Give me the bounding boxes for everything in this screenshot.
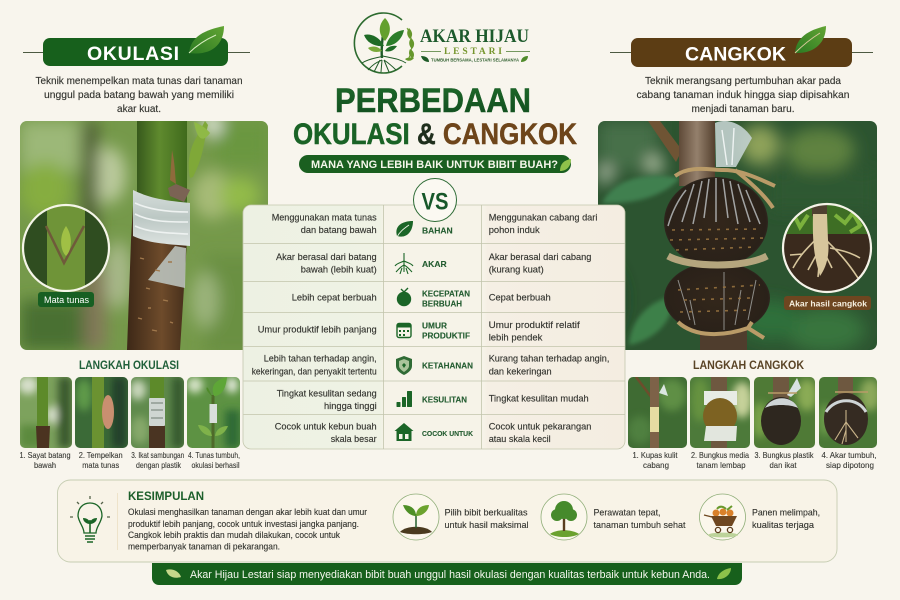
text: perawatan: Perawatan tepat, bbox=[594, 508, 660, 518]
captions: cabang bbox=[643, 460, 669, 470]
main title bbox=[293, 82, 578, 151]
label: akar hasil cangkok: Akar hasil cangkok bbox=[789, 298, 867, 308]
captions: 3. Ikat sambungan bbox=[131, 450, 184, 460]
text: panen: Panen melimpah, bbox=[752, 508, 820, 518]
captions bbox=[632, 450, 876, 470]
row: akar: AKAR bbox=[422, 259, 447, 269]
row: bahan: pohon induk bbox=[489, 225, 540, 236]
step 1 image bbox=[18, 376, 72, 448]
row: cocok untuk bbox=[275, 422, 591, 445]
row: bahan: Menggunakan cabang dari bbox=[489, 212, 597, 224]
captions: 2. Tempelkan bbox=[79, 450, 123, 460]
panel: okulasi header bbox=[23, 26, 250, 66]
row: ketahanan: kekeringan, dan penyakit tertentu bbox=[252, 366, 377, 378]
icon: seedling bbox=[393, 494, 439, 540]
text: kesimpulan: Cangkok lebih praktis dan mudah dilakukan, cocok untuk bbox=[128, 530, 341, 540]
row: bahan: BAHAN bbox=[422, 226, 453, 236]
row: umur produktif: Umur produktif lebih panjang bbox=[258, 324, 377, 336]
label: akar hasil cangkok bbox=[784, 296, 871, 310]
text: kesimpulan: produktif lebih panjang, cocok untuk investasi jangka panjang. bbox=[128, 519, 359, 529]
plastic bbox=[715, 121, 752, 167]
steps: cangkok bbox=[628, 377, 880, 470]
logo name: AKAR HIJAU bbox=[420, 27, 529, 47]
icon: roots bbox=[395, 253, 413, 274]
row: kecepatan berbuah: KECEPATAN bbox=[422, 288, 470, 298]
row: umur produktif bbox=[258, 320, 580, 344]
photo: okulasi graft bbox=[19, 112, 270, 355]
row: akar: Akar berasal dari cabang bbox=[489, 252, 591, 263]
row: kecepatan berbuah bbox=[292, 288, 551, 308]
text: pilih bibit: untuk hasil maksimal bbox=[444, 520, 529, 530]
branch bbox=[648, 121, 682, 162]
row: bahan bbox=[272, 212, 597, 237]
text: pilih bibit: Pilih bibit berkualitas bbox=[444, 508, 528, 518]
row: umur produktif: PRODUKTIF bbox=[422, 330, 470, 340]
step 2 image bbox=[75, 377, 128, 448]
icon: light bulb bbox=[70, 496, 110, 542]
row: cocok untuk: Cocok untuk kebun buah bbox=[275, 422, 377, 432]
captions: 1. Kupas kulit bbox=[632, 450, 678, 460]
inset: mata tunas bbox=[22, 204, 110, 292]
banner text: Akar Hijau Lestari siap menyediakan bibit buah unggul hasil okulasi dengan kualitas terbaik untuk kebun Anda. bbox=[190, 569, 710, 581]
icon: wheelbarrow bbox=[700, 494, 746, 540]
row: kecepatan berbuah: BERBUAH bbox=[422, 298, 462, 308]
icon: calendar bbox=[397, 324, 411, 338]
text: cangkok description: cabang tanaman induk hingga siap dipisahkan bbox=[636, 89, 850, 101]
icon: fruit bbox=[397, 288, 411, 306]
captions: siap dipotong bbox=[826, 460, 874, 470]
text: okulasi description: akar kuat. bbox=[117, 103, 161, 115]
row: bahan: dan batang bawah bbox=[301, 225, 377, 236]
text: kesimpulan: memperbanyak tanaman di pekarangan. bbox=[128, 542, 280, 552]
row: kesulitan: KESULITAN bbox=[422, 394, 467, 404]
steps: okulasi bbox=[18, 376, 240, 470]
subtitle pill: MANA YANG LEBIH BAIK UNTUK BIBIT BUAH? bbox=[311, 159, 558, 171]
inset: roots bbox=[780, 200, 875, 296]
text: okulasi description: unggul pada batang bawah yang memiliki bbox=[44, 89, 234, 101]
row: cocok untuk: skala besar bbox=[331, 434, 377, 445]
bag bbox=[664, 177, 768, 267]
vs badge bbox=[414, 178, 456, 222]
captions: 4. Akar tumbuh, bbox=[822, 450, 876, 460]
text: perawatan bbox=[594, 508, 686, 530]
captions: dan ikat bbox=[770, 460, 797, 470]
row: cocok untuk: Cocok untuk pekarangan bbox=[489, 422, 591, 432]
icon: leaf bbox=[189, 26, 224, 53]
row: ketahanan: Lebih tahan terhadap angin, bbox=[264, 354, 377, 364]
footer banner bbox=[152, 563, 742, 585]
captions: 4. Tunas tumbuh, bbox=[188, 450, 240, 460]
icon: house bbox=[394, 423, 414, 441]
captions: 1. Sayat batang bbox=[20, 450, 71, 460]
text: pilih bibit bbox=[444, 508, 529, 530]
text: cangkok description bbox=[636, 75, 850, 115]
stem bbox=[137, 121, 187, 205]
logo emblem: tree with roots bbox=[354, 13, 414, 73]
icon: tree bbox=[541, 494, 587, 540]
step 4 image bbox=[818, 377, 880, 448]
row: cocok untuk: atau skala kecil bbox=[489, 434, 551, 445]
twine bbox=[668, 256, 767, 265]
title line 1: PERBEDAAN bbox=[335, 82, 531, 120]
captions: dengan plastik bbox=[136, 460, 182, 470]
logo subname: LESTARI bbox=[444, 47, 502, 57]
row: umur produktif: Umur produktif relatif bbox=[489, 320, 580, 331]
heading: okulasi: OKULASI bbox=[87, 43, 179, 65]
panel: kesimpulan bbox=[58, 480, 837, 562]
background leaves bbox=[602, 176, 680, 345]
captions: 3. Bungkus plastik bbox=[754, 450, 814, 460]
row: cocok untuk: COCOK UNTUK bbox=[422, 429, 474, 438]
text: cangkok description: menjadi tanaman baru. bbox=[692, 103, 794, 115]
row: kesulitan: Tingkat kesulitan sedang bbox=[277, 388, 377, 400]
captions: mata tunas bbox=[82, 460, 119, 470]
logo: Akar Hijau Lestari bbox=[354, 13, 530, 73]
vs badge: VS bbox=[422, 188, 448, 216]
row: ketahanan: dan kekeringan bbox=[489, 366, 552, 378]
row: umur produktif: UMUR bbox=[422, 320, 447, 330]
row: akar: Akar berasal dari batang bbox=[276, 252, 377, 263]
icon: leaf right bbox=[717, 568, 731, 579]
row: kecepatan berbuah: Cepat berbuah bbox=[489, 292, 551, 304]
step 4 image bbox=[187, 377, 240, 448]
captions: okulasi berhasil bbox=[192, 460, 240, 470]
icon: bars bbox=[396, 391, 412, 407]
bark texture bbox=[138, 258, 173, 331]
heading: langkah cangkok: LANGKAH CANGKOK bbox=[693, 358, 804, 372]
step 1 image bbox=[628, 377, 687, 448]
text: panen bbox=[752, 508, 820, 530]
row: kesulitan bbox=[277, 388, 589, 412]
text: okulasi description bbox=[36, 75, 243, 115]
text: kesimpulan bbox=[128, 507, 367, 552]
row: kesulitan: Tingkat kesulitan mudah bbox=[489, 394, 589, 404]
label: mata tunas bbox=[38, 292, 94, 307]
row: ketahanan: KETAHANAN bbox=[422, 360, 473, 370]
icon: leaf bbox=[795, 26, 826, 53]
row: kesulitan: hingga tinggi bbox=[324, 401, 377, 412]
title line 2: OKULASI & CANGKOK bbox=[293, 118, 578, 151]
heading: cangkok: CANGKOK bbox=[685, 44, 786, 66]
row: akar: (kurang kuat) bbox=[489, 264, 544, 276]
panel: comparison table bbox=[243, 205, 625, 449]
icon: leaf bbox=[396, 221, 413, 237]
text: cangkok description: Teknik merangsang pertumbuhan akar pada bbox=[645, 75, 841, 87]
text: perawatan: tanaman tumbuh sehat bbox=[594, 520, 686, 530]
captions: bawah bbox=[34, 460, 56, 470]
row: akar: bawah (lebih kuat) bbox=[301, 264, 377, 276]
row: umur produktif: lebih pendek bbox=[489, 332, 543, 344]
label: mata tunas: Mata tunas bbox=[44, 295, 89, 305]
row: kecepatan berbuah: Lebih cepat berbuah bbox=[292, 292, 377, 304]
panel: cangkok header bbox=[610, 26, 873, 67]
row: akar bbox=[276, 252, 591, 276]
text: okulasi description: Teknik menempelkan mata tunas dari tanaman bbox=[36, 75, 243, 87]
subtitle pill bbox=[299, 155, 571, 173]
step 3 image bbox=[130, 377, 184, 448]
bud bbox=[189, 121, 208, 178]
step 2 image bbox=[690, 377, 752, 448]
icon: leaf left bbox=[166, 569, 181, 578]
step 3 image bbox=[752, 377, 817, 448]
row: ketahanan bbox=[252, 354, 609, 378]
heading: langkah okulasi: LANGKAH OKULASI bbox=[79, 358, 179, 372]
row: bahan: Menggunakan mata tunas bbox=[272, 212, 377, 224]
text: panen: kualitas terjaga bbox=[752, 520, 814, 530]
captions bbox=[20, 450, 240, 470]
captions: tanam lembap bbox=[696, 460, 746, 470]
photo: cangkok air layer bbox=[576, 121, 877, 352]
text: kesimpulan: Okulasi menghasilkan tanaman dengan akar lebih kuat dan umur bbox=[128, 507, 367, 517]
heading: kesimpulan: KESIMPULAN bbox=[128, 489, 204, 503]
row: ketahanan: Kurang tahan terhadap angin, bbox=[489, 354, 609, 364]
captions: 2. Bungkus media bbox=[691, 450, 749, 460]
logo tagline: TUMBUH BERSAMA, LESTARI SELAMANYA bbox=[431, 58, 520, 62]
icon: shield bbox=[396, 356, 412, 375]
